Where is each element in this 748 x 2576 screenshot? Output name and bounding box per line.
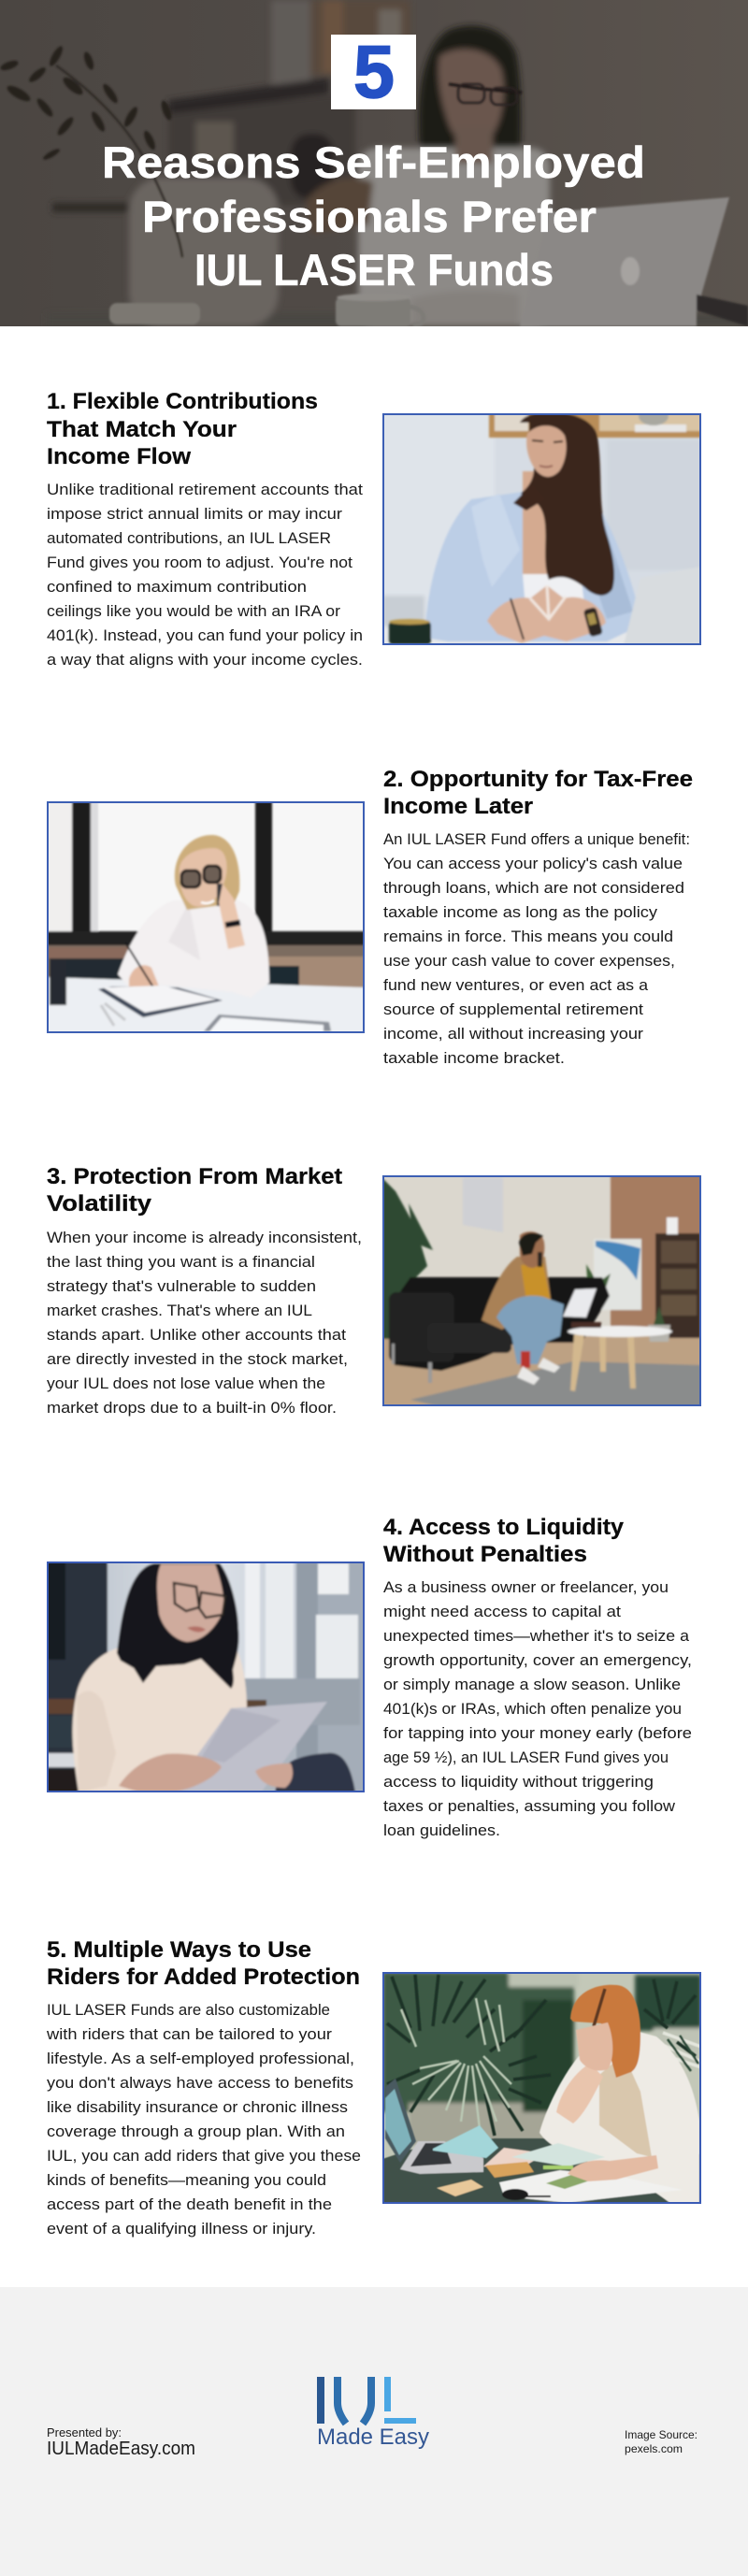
glasses bbox=[449, 84, 522, 93]
image source bbox=[625, 2428, 698, 2455]
hands bbox=[119, 1754, 222, 1792]
mugs bbox=[336, 297, 410, 326]
phone + arm bbox=[217, 884, 223, 906]
panel: reason 1 bbox=[47, 389, 701, 669]
body text: reason 5 bbox=[46, 2002, 361, 2238]
body text: reason 4: might need access to capital at bbox=[383, 1604, 621, 1620]
body text: reason 4: loan guidelines. bbox=[383, 1822, 500, 1839]
heading: reason 5: 5. Multiple Ways to Use bbox=[47, 1937, 311, 1963]
body text: reason 5: kinds of benefits—meaning you could bbox=[47, 2172, 326, 2189]
rug bbox=[410, 1361, 701, 1406]
heading: reason 4: 4. Access to Liquidity bbox=[383, 1515, 625, 1540]
body text: reason 3: the last thing you want is a financial bbox=[47, 1254, 315, 1271]
body text: reason 4: As a business owner or freelancer, you bbox=[383, 1579, 669, 1596]
body text: reason 5: lifestyle. As a self-employed professional, bbox=[47, 2051, 354, 2067]
body text: reason 1: Unlike traditional retirement accounts that bbox=[47, 482, 363, 498]
body text: reason 1: automated contributions, an IUL LASER bbox=[47, 530, 331, 547]
body text: reason 1: confined to maximum contribution bbox=[47, 579, 307, 596]
hands bbox=[487, 585, 606, 643]
body text: reason 2: taxable income as long as the policy bbox=[383, 904, 658, 921]
magnifier bbox=[502, 2189, 528, 2200]
body text: reason 1: Fund gives you room to adjust. You're not bbox=[47, 554, 352, 571]
glasses bbox=[174, 1583, 199, 1611]
table bbox=[570, 1334, 636, 1391]
body text: reason 4: or simply manage a slow season. Unlike bbox=[383, 1677, 681, 1693]
heading: reason 2 bbox=[383, 767, 693, 819]
paper bbox=[171, 1702, 327, 1792]
body text: reason 4: for tapping into your money early (before bbox=[383, 1725, 692, 1742]
body text: reason 3: are directly invested in the stock market, bbox=[47, 1351, 348, 1368]
sofa bbox=[392, 1277, 610, 1371]
hair bbox=[520, 412, 614, 596]
body text: reason 4: growth opportunity, cover an emergency, bbox=[383, 1652, 692, 1669]
body text: reason 2: use your cash value to cover expenses, bbox=[383, 953, 675, 970]
face bbox=[526, 425, 567, 477]
shirt bbox=[118, 899, 269, 998]
body text: reason 5: you don't always have access to benefits bbox=[47, 2075, 353, 2092]
body text: reason 4: unexpected times—whether it's to seize a bbox=[383, 1628, 690, 1645]
logo: IUL Made Easy: Made Easy bbox=[317, 2425, 429, 2450]
shoes bbox=[521, 1351, 530, 1368]
hair bbox=[570, 1985, 640, 2078]
desk bbox=[47, 977, 365, 1033]
heading: reason 5: Riders for Added Protection bbox=[47, 1964, 360, 1990]
body text: reason 1: ceilings like you would be with an IRA or bbox=[47, 603, 341, 620]
laptop bbox=[624, 567, 701, 645]
heading: reason 1: That Match Your bbox=[47, 417, 237, 442]
heading: reason 3: 3. Protection From Market bbox=[47, 1164, 342, 1189]
hair bbox=[117, 1563, 238, 1689]
blue painting bbox=[594, 1239, 641, 1310]
footer bbox=[0, 2287, 748, 2576]
heading: reason 2: Income Later bbox=[383, 794, 533, 819]
image source: Image Source: bbox=[625, 2428, 698, 2441]
sweater bbox=[73, 1643, 247, 1792]
body text: reason 4: taxes or penalties, assuming you follow bbox=[383, 1798, 675, 1815]
body text: reason 2: income, all without increasing your bbox=[383, 1026, 644, 1043]
plant bbox=[0, 45, 174, 162]
body text: reason 2 bbox=[383, 831, 690, 1067]
arm bbox=[556, 2064, 603, 2123]
title: Reasons Self-Employed bbox=[102, 137, 645, 187]
body text: reason 5: coverage through a group plan. With an bbox=[47, 2123, 345, 2140]
panel: reason 2 bbox=[47, 767, 693, 1067]
pens bbox=[101, 1003, 125, 1026]
badge: number 5: 5 bbox=[353, 30, 395, 113]
table bbox=[382, 2138, 701, 2204]
body text: reason 4: access to liquidity without triggering bbox=[383, 1774, 654, 1791]
heading: reason 3: Volatility bbox=[47, 1191, 152, 1216]
image source: pexels.com bbox=[625, 2442, 683, 2455]
laptop bbox=[385, 2079, 416, 2163]
logo: IUL Made Easy bbox=[317, 2377, 429, 2450]
painting bbox=[463, 1178, 503, 1232]
body text: reason 2: taxable income bracket. bbox=[383, 1050, 565, 1067]
shelf bbox=[655, 1233, 700, 1338]
body text: reason 1 bbox=[47, 482, 363, 669]
body text: reason 5: with riders that can be tailored to your bbox=[46, 2026, 333, 2043]
title: Professionals Prefer bbox=[142, 192, 597, 241]
body text: reason 3: market drops due to a built-in 0% floor. bbox=[47, 1400, 337, 1417]
photo: blonde woman on phone at window desk bbox=[47, 801, 365, 1033]
hair bbox=[175, 835, 239, 910]
body text: reason 1: a way that aligns with your income cycles. bbox=[47, 652, 363, 669]
body text: reason 5: IUL, you can add riders that give you these bbox=[47, 2148, 361, 2165]
pot bbox=[648, 1325, 670, 1342]
tablet bbox=[204, 1015, 331, 1031]
heading: reason 1 bbox=[47, 389, 318, 469]
body text: reason 1: 401(k). Instead, you can fund your policy in bbox=[47, 627, 363, 644]
body text: reason 4 bbox=[383, 1579, 692, 1839]
body text: reason 3: your IUL does not lose value when the bbox=[47, 1375, 325, 1392]
laptop bbox=[520, 197, 729, 326]
photo: red-haired woman among palm plants bbox=[382, 1972, 701, 2204]
panel: reason 3 bbox=[47, 1164, 701, 1417]
photo: man on sofa with laptop bbox=[382, 1175, 701, 1406]
man bbox=[482, 1257, 553, 1330]
heading: reason 3 bbox=[47, 1164, 342, 1216]
palm fronds bbox=[387, 1975, 696, 2136]
photo: woman in blue blazer at desk bbox=[382, 413, 701, 645]
panel: reason 5 bbox=[46, 1937, 701, 2238]
shirt bbox=[539, 2029, 699, 2204]
title bbox=[102, 137, 645, 295]
clipboard bbox=[98, 986, 223, 1017]
body text: reason 1: impose strict annual limits or may incur bbox=[47, 506, 343, 523]
title: IUL LASER Funds bbox=[194, 245, 554, 295]
photo: woman with glasses reading paper bbox=[47, 1561, 365, 1792]
writing hand bbox=[129, 965, 159, 1000]
mug bbox=[389, 622, 431, 644]
body text: reason 2: You can access your policy's cash value bbox=[383, 856, 683, 872]
blue folder bbox=[433, 2125, 498, 2158]
presented by: IULMadeEasy.com bbox=[47, 2439, 195, 2459]
glasses bbox=[181, 871, 200, 887]
heading: reason 1: 1. Flexible Contributions bbox=[47, 389, 318, 414]
body text: reason 5: event of a qualifying illness or injury. bbox=[47, 2221, 316, 2238]
heading: reason 5 bbox=[47, 1937, 360, 1990]
body text: reason 4: 401(k)s or IRAs, which often penalize you bbox=[383, 1701, 682, 1718]
face bbox=[576, 2022, 612, 2071]
body text: reason 4: age 59 ½), an IUL LASER Fund gives you bbox=[383, 1749, 669, 1766]
body text: reason 3: stands apart. Unlike other accounts that bbox=[47, 1327, 346, 1344]
bottle bbox=[50, 958, 66, 1005]
face bbox=[157, 1564, 223, 1642]
body text: reason 2: fund new ventures, or even act as a bbox=[383, 977, 649, 994]
header photo: woman at laptop bbox=[0, 0, 748, 326]
header banner bbox=[0, 0, 748, 326]
body text: reason 3 bbox=[47, 1230, 362, 1417]
heading: reason 2: 2. Opportunity for Tax-Free bbox=[383, 767, 693, 792]
heading: reason 4 bbox=[383, 1515, 625, 1567]
body text: reason 3: strategy that's vulnerable to sudden bbox=[47, 1278, 316, 1295]
heading: reason 1: Income Flow bbox=[47, 444, 191, 469]
body text: reason 2: source of supplemental retirement bbox=[383, 1001, 643, 1018]
body text: reason 5: like disability insurance or chronic illness bbox=[47, 2099, 348, 2116]
skin + top bbox=[523, 471, 583, 578]
body text: reason 2: remains in force. This means you could bbox=[383, 928, 673, 945]
shelf bbox=[489, 413, 701, 438]
body text: reason 5: access part of the death benefit in the bbox=[47, 2196, 332, 2213]
body text: reason 3: When your income is already inconsistent, bbox=[47, 1230, 362, 1246]
papers bbox=[483, 2148, 546, 2170]
presented by: Presented by: bbox=[47, 2425, 122, 2439]
body text: reason 3: market crashes. That's where an IUL bbox=[47, 1302, 312, 1319]
body text: reason 2: through loans, which are not considered bbox=[383, 880, 684, 897]
body text: reason 2: An IUL LASER Fund offers a unique benefit: bbox=[383, 831, 690, 848]
badge: number 5 bbox=[331, 30, 416, 113]
presented by bbox=[47, 2425, 195, 2459]
heading: reason 4: Without Penalties bbox=[383, 1542, 587, 1567]
hand bbox=[568, 2155, 658, 2181]
body text: reason 5: IUL LASER Funds are also customizable bbox=[47, 2002, 330, 2019]
blazer bbox=[424, 492, 642, 641]
laptop bbox=[563, 1288, 597, 1317]
panel: reason 4 bbox=[47, 1515, 692, 1839]
plant bbox=[382, 1178, 433, 1339]
